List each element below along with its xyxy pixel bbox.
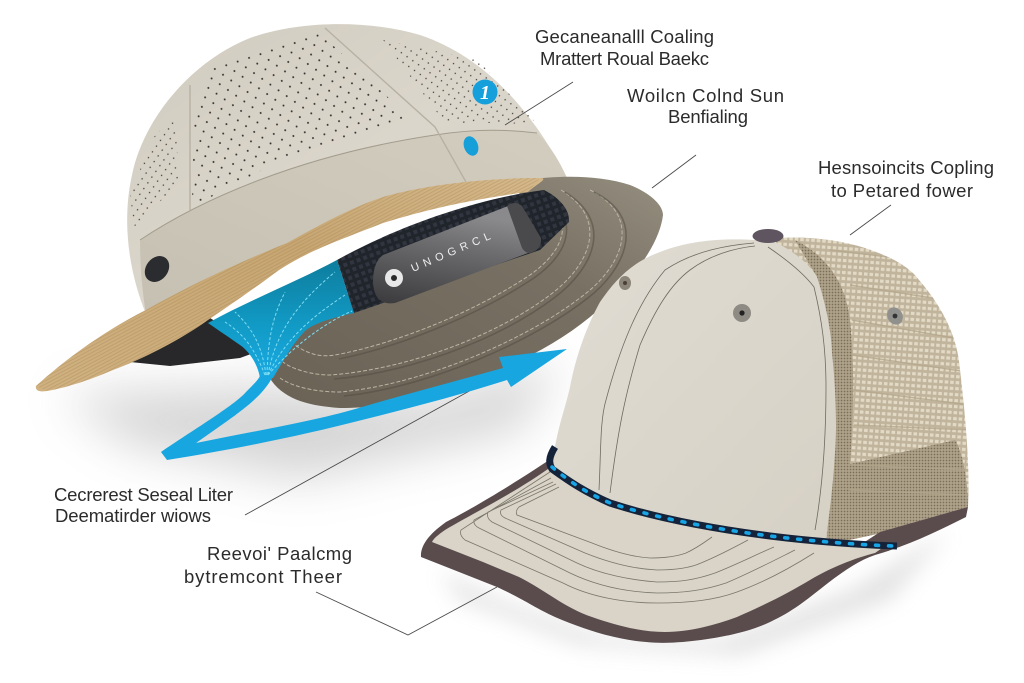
callout: Gecaneanalll Coaling: Gecaneanalll Coaling <box>535 26 714 47</box>
front panel <box>552 239 836 538</box>
dark underside near brim tip <box>130 318 262 366</box>
panel seams <box>190 28 466 210</box>
callout: Gecaneanalll Coaling <box>505 26 714 125</box>
grommet: left <box>619 276 631 290</box>
callout: Hesnsoincits Copling: to Petared fower <box>831 180 973 201</box>
badge: number 1: 1 <box>480 82 490 104</box>
brim wood grain <box>36 178 540 391</box>
hat: vented bucket-style hat <box>36 24 663 408</box>
callout: Hesnsoincits Copling <box>818 157 994 235</box>
callout: Woilcn Colnd Sun <box>627 85 784 188</box>
dense mesh side strip <box>795 240 968 545</box>
underbrim ridges <box>334 192 626 396</box>
tan brim <box>36 178 543 391</box>
crown band <box>140 130 568 314</box>
strap logo <box>385 269 403 287</box>
callout: Woilcn Colnd Sun: Benfialing <box>668 106 748 127</box>
callout: Cecrerest Seseal Liter: Cecrerest Seseal Liter <box>54 484 233 505</box>
crown <box>127 24 568 314</box>
adjustment strap <box>373 203 541 303</box>
perforated right panel <box>383 40 538 125</box>
rope <box>550 447 897 546</box>
callout: Reevoi' Paalcmg: bytremcont Theer <box>184 566 342 587</box>
strap lettering: UNOGRCL <box>409 229 497 275</box>
callout: Gecaneanalll Coaling: Mrattert Roual Baekc <box>540 48 709 69</box>
mesh ribs <box>830 250 970 495</box>
callout: Cecrerest Seseal Liter <box>54 484 233 526</box>
callout: Woilcn Colnd Sun: Woilcn Colnd Sun <box>627 85 784 106</box>
callout: Hesnsoincits Copling: Hesnsoincits Copling <box>818 157 994 178</box>
callout: Cecrerest Seseal Liter: Deematirder wiows <box>55 505 211 526</box>
hat: trucker cap <box>421 229 970 643</box>
brim stitching <box>460 472 814 603</box>
ground shadow: trucker cap <box>440 530 950 655</box>
badge: number 1 <box>472 80 498 104</box>
callout: Reevoi' Paalcmg: Reevoi' Paalcmg <box>207 543 352 564</box>
perforated front panel <box>192 33 412 207</box>
strap tab <box>507 203 541 253</box>
blue vent button <box>461 134 481 158</box>
band seam <box>140 130 537 240</box>
leader line: lining callout <box>245 384 482 515</box>
grommet: front <box>733 304 751 322</box>
callout: Reevoi' Paalcmg <box>184 543 497 635</box>
brim top <box>432 466 885 632</box>
brown brim edge <box>421 458 968 643</box>
gusset stitching <box>225 272 352 375</box>
grommet: side <box>884 304 906 328</box>
arrow: blue airflow <box>161 349 567 460</box>
panel seam lines <box>599 243 826 530</box>
dark mesh lining <box>337 190 569 313</box>
top button <box>752 229 784 243</box>
blue cooling gusset <box>208 260 354 378</box>
rope blue dots <box>552 467 895 546</box>
grey underbrim <box>271 177 663 408</box>
underbrim stitching <box>280 190 622 392</box>
mesh back panel <box>775 237 969 545</box>
perforated left panel <box>130 113 179 227</box>
ground shadow: bucket hat <box>60 360 560 480</box>
dark side button <box>140 251 174 287</box>
